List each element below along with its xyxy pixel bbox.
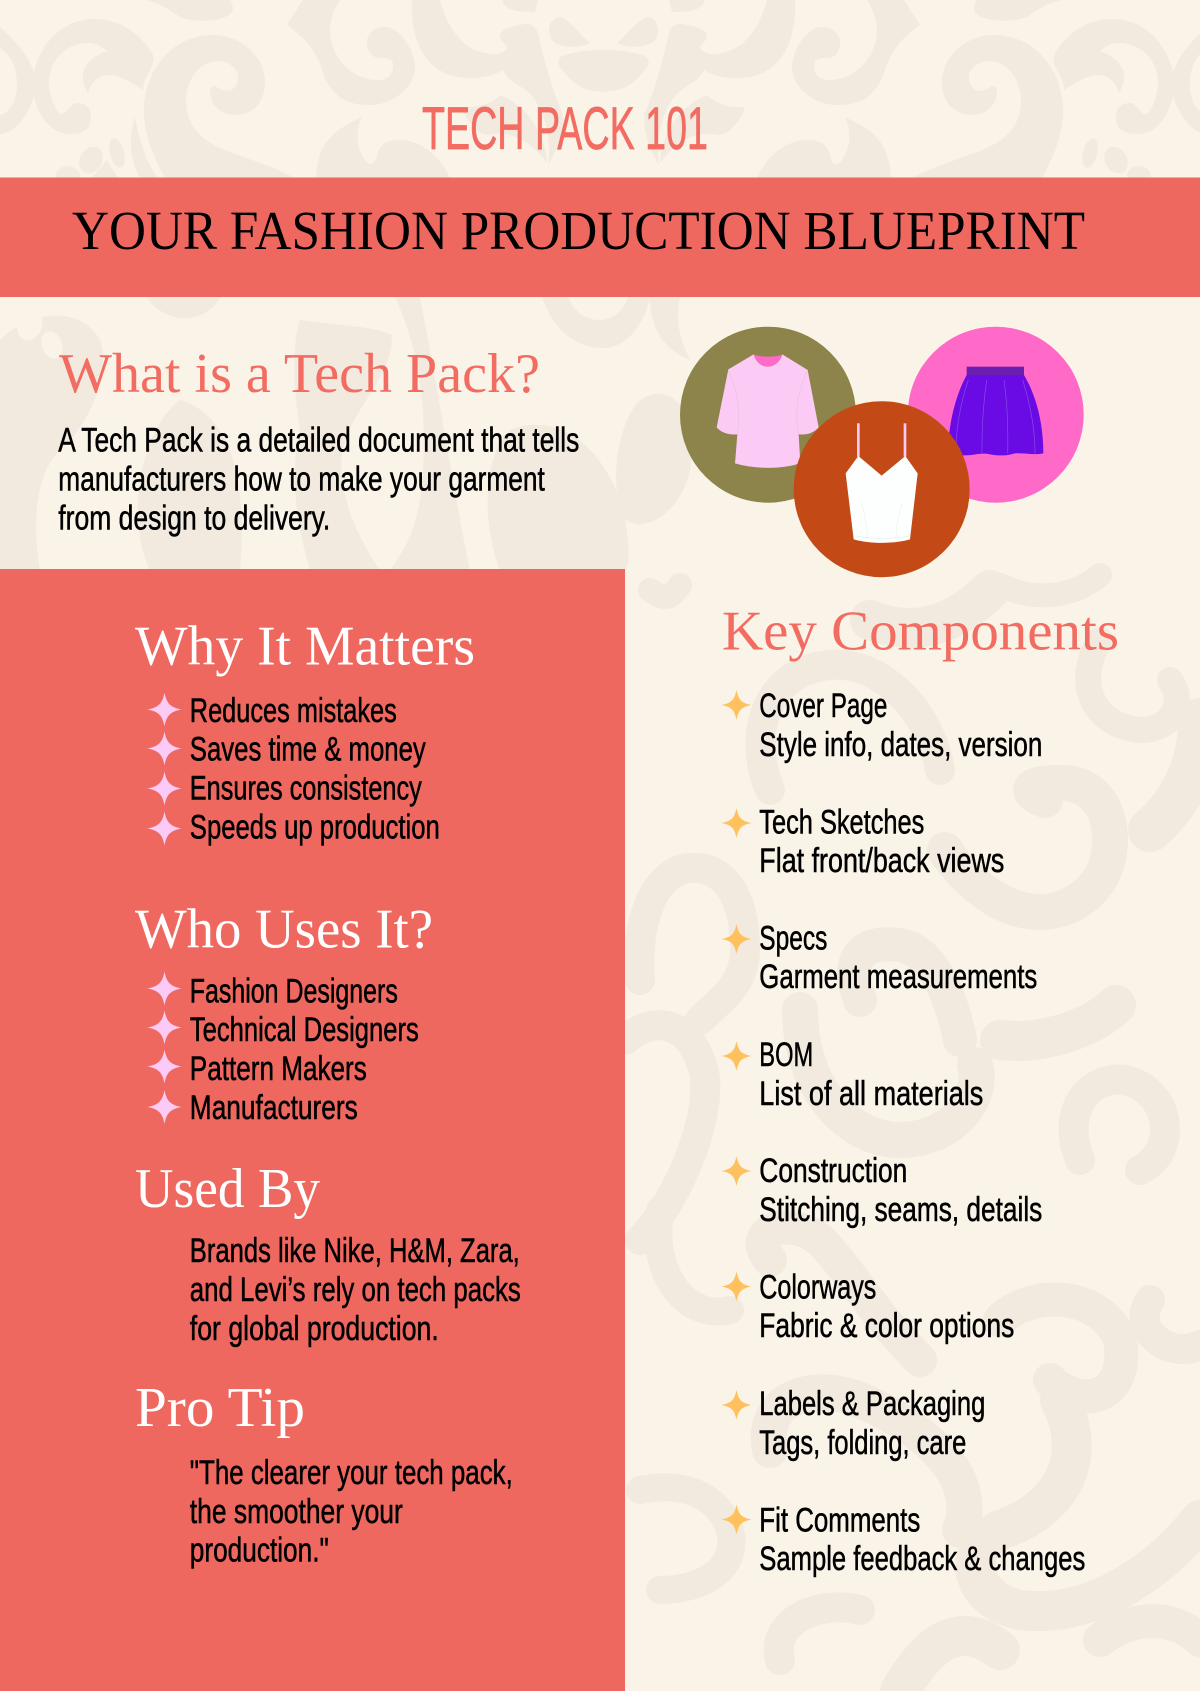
list: why it matters bullets: Speeds up production [190,808,440,846]
item: cover page [722,687,1042,764]
section: what is a tech pack: A Tech Pack is a detailed document that tells [58,422,579,460]
section: used by: and Levi’s rely on tech packs [190,1271,521,1309]
section: key components: Key Components [722,600,1119,662]
section: what is a tech pack [58,343,579,538]
item: construction: Construction [759,1152,907,1190]
item: construction: Stitching, seams, details [759,1191,1042,1229]
section: what is a tech pack: from design to delivery. [58,500,330,538]
list: why it matters bullets: Reduces mistakes [190,692,397,730]
section: key components [722,600,1119,1578]
section: pro tip: production." [190,1532,329,1570]
item: fit comments [722,1502,1085,1578]
item: fit comments: Sample feedback & changes [759,1540,1085,1578]
list: who uses it bullets: Manufacturers [190,1089,358,1127]
item: fit comments: Fit Comments [759,1502,920,1540]
section: what is a tech pack: manufacturers how to make your garment [58,460,545,498]
title: TECH PACK 101 [422,95,708,162]
item: specs: Garment measurements [759,958,1037,996]
list: why it matters bullets [148,692,440,846]
icon: skirt [908,327,1084,503]
item: construction [722,1152,1042,1229]
section: used by: for global production. [190,1310,439,1348]
subtitle banner: YOUR FASHION PRODUCTION BLUEPRINT [72,200,1085,261]
item: tech sketches: Flat front/back views [759,842,1004,880]
section: why it matters: Why It Matters [135,616,475,678]
section: used by: Used By [135,1158,320,1220]
list: who uses it bullets: Technical Designers [190,1011,419,1049]
panel: left coral column [0,569,625,1691]
icon: t-shirt [680,327,856,503]
item: cover page: Style info, dates, version [759,726,1042,764]
section: pro tip [135,1377,513,1570]
item: labels and packaging: Labels & Packaging [759,1385,985,1423]
section: who uses it [135,898,433,1127]
section: pro tip: Pro Tip [135,1377,305,1439]
section: pro tip: "The clearer your tech pack, [190,1454,513,1492]
section: who uses it: Who Uses It? [135,898,433,960]
icon: camisole top [794,401,970,577]
item: bom: List of all materials [759,1075,983,1113]
item: tech sketches [722,804,1004,880]
item: tech sketches: Tech Sketches [759,804,924,842]
section: what is a tech pack: What is a Tech Pack? [59,343,540,405]
item: labels and packaging: Tags, folding, care [759,1424,966,1462]
item: specs: Specs [759,920,827,958]
list: who uses it bullets: Fashion Designers [190,972,398,1010]
list: why it matters bullets: Saves time & money [190,730,426,768]
item: colorways [722,1268,1014,1345]
section: pro tip: the smoother your [190,1493,403,1531]
item: bom: BOM [759,1036,813,1074]
list: why it matters bullets: Ensures consistency [190,770,422,808]
mid and lower damask [0,297,692,570]
item: cover page: Cover Page [759,687,887,725]
section: used by [135,1158,521,1348]
subtitle banner [0,178,1200,297]
garment icons [680,327,1084,577]
list: who uses it bullets: Pattern Makers [190,1050,367,1088]
item: bom [722,1036,983,1113]
section: used by: Brands like Nike, H&M, Zara, [190,1232,520,1270]
item: labels and packaging [722,1385,985,1462]
item: colorways: Fabric & color options [759,1307,1014,1345]
item: specs [722,920,1037,996]
list: who uses it bullets [148,972,419,1127]
item: colorways: Colorways [759,1268,876,1306]
section: why it matters [135,616,475,846]
